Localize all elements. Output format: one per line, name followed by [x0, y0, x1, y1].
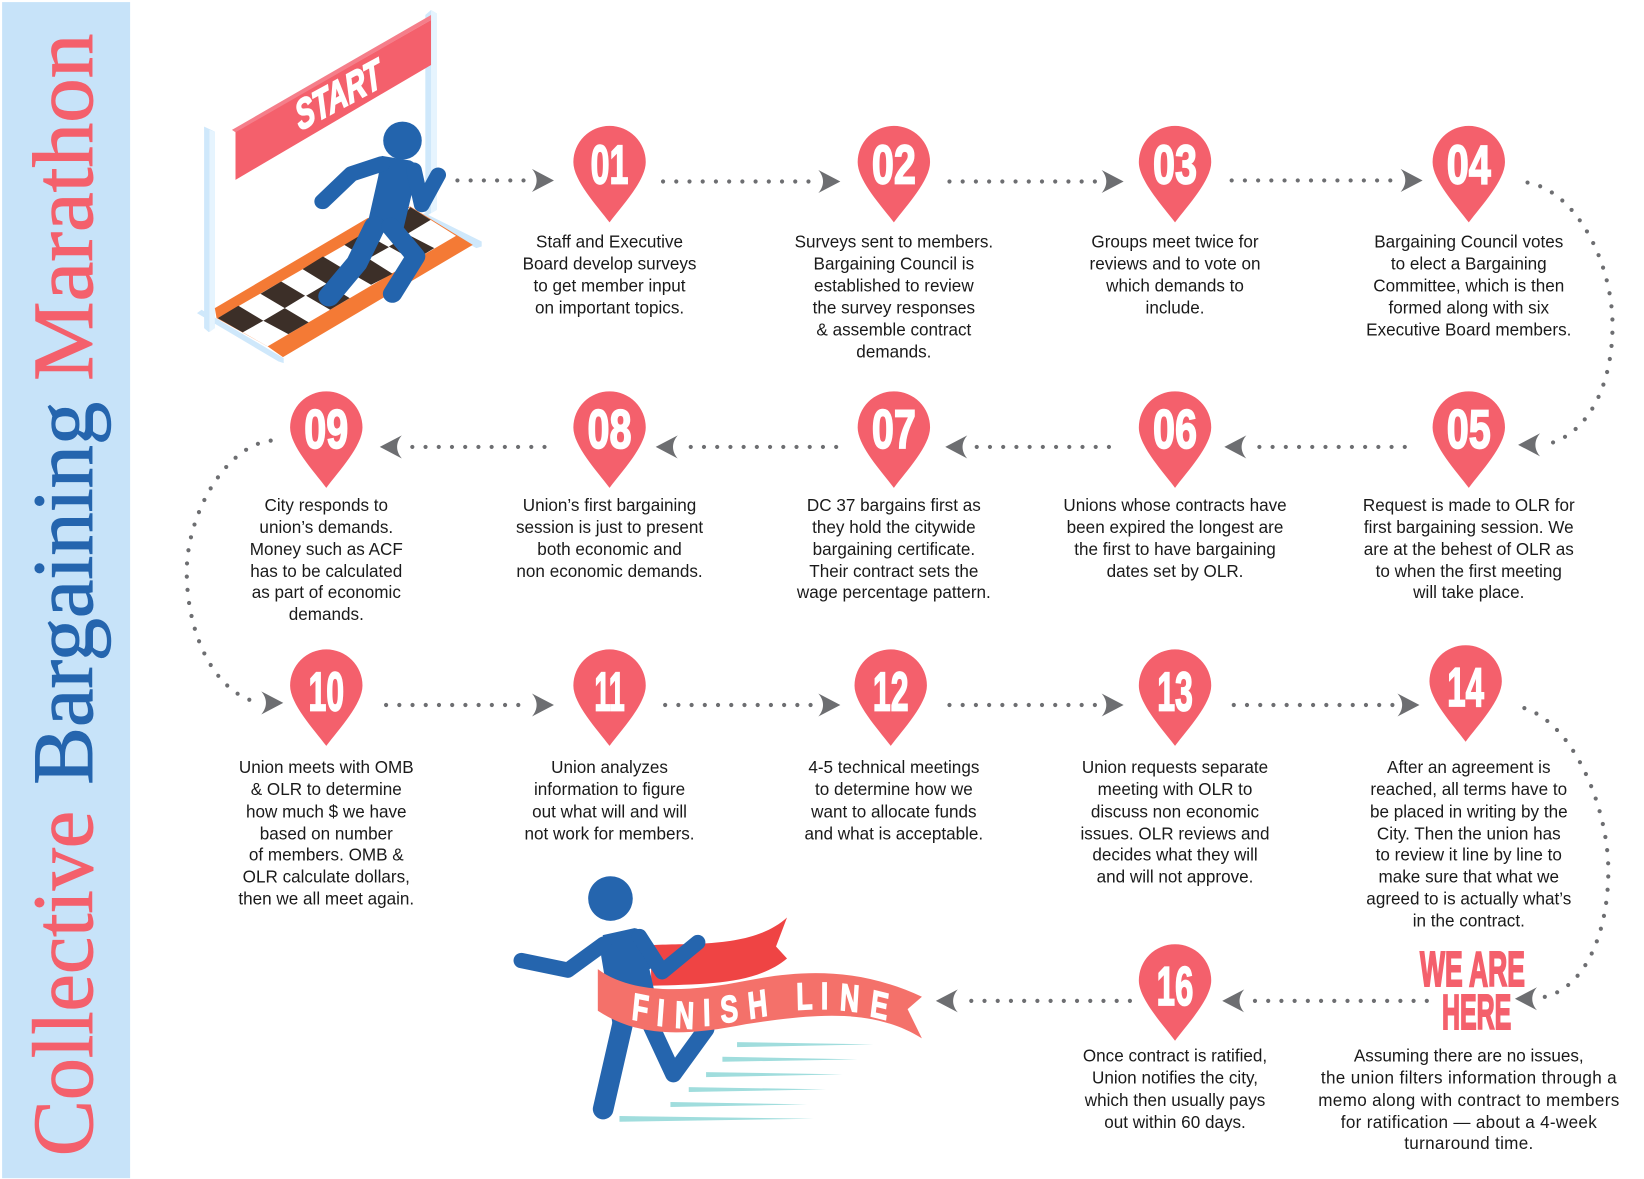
arrow: 16 to finish — [936, 989, 1130, 1012]
text 07: DC 37 bargains first as — [807, 496, 981, 515]
text 08: both economic and — [537, 540, 682, 559]
pin 07: 07 — [872, 399, 916, 460]
pin 03 — [1139, 126, 1211, 222]
pin 12: 12 — [873, 661, 909, 722]
text 03: which demands to — [1105, 277, 1244, 296]
pin 04: 04 — [1447, 135, 1491, 196]
text 06: been expired the longest are — [1067, 518, 1283, 537]
text 14: make sure that what we — [1379, 867, 1559, 886]
text 15: memo along with contract to members — [1318, 1091, 1619, 1110]
pin 06: 06 — [1153, 399, 1197, 460]
title: Collective Bargaining Marathon — [15, 34, 111, 1156]
pin 16 — [1139, 944, 1211, 1041]
text 04: Executive Board members. — [1366, 321, 1571, 340]
text 09: Money such as ACF — [250, 540, 403, 559]
text 10: of members. OMB & — [249, 845, 404, 864]
text 09: demands. — [289, 605, 364, 624]
text 09: City responds to — [265, 496, 388, 515]
runner figure — [521, 876, 706, 1109]
pin 02 — [858, 126, 930, 222]
pin 14 — [1429, 645, 1502, 742]
text 05: are at the behest of OLR as — [1364, 540, 1574, 559]
arrow: 14 to we are here — [1515, 708, 1608, 1010]
illustration: runner at finish line — [521, 876, 922, 1122]
step 06 — [1063, 391, 1287, 581]
text 07: wage percentage pattern. — [796, 583, 991, 602]
step 15: we are here — [1318, 942, 1619, 1153]
pin 11: 11 — [594, 661, 625, 722]
pin 13 — [1139, 649, 1211, 746]
text 16: Union notifies the city, — [1092, 1069, 1258, 1088]
text 14: agreed to is actually what’s — [1366, 889, 1571, 908]
text 04: to elect a Bargaining — [1391, 255, 1547, 274]
step 14 — [1366, 645, 1571, 930]
text 15: turnaround time. — [1404, 1134, 1533, 1153]
step 09 — [250, 391, 403, 624]
pin 09: 09 — [304, 399, 348, 460]
pin 09 — [290, 391, 362, 488]
arrow: 02 to 03 — [949, 170, 1124, 193]
arrow: we are here to 16 — [1222, 989, 1427, 1012]
text 02: Bargaining Council is — [814, 255, 974, 274]
pin 11 — [573, 649, 646, 746]
text 14: reached, all terms have to — [1370, 780, 1567, 799]
title: Collective Bargaining Marathon: Collective — [15, 811, 111, 1156]
text 15: the union filters information through a — [1321, 1069, 1617, 1088]
arrow: 03 to 04 — [1232, 169, 1423, 192]
pin 05: 05 — [1447, 399, 1491, 460]
arrow: 08 to 09 — [380, 435, 545, 458]
text 16: which then usually pays — [1084, 1091, 1265, 1110]
pin 04 — [1433, 126, 1505, 222]
arrow: 01 to 02 — [663, 170, 840, 193]
text 06: the first to have bargaining — [1074, 540, 1276, 559]
text 04: formed along with six — [1388, 299, 1550, 318]
text 14: After an agreement is — [1387, 758, 1551, 777]
text 13: issues. OLR reviews and — [1080, 824, 1270, 843]
text 14: be placed in writing by the — [1370, 802, 1568, 821]
step 12 — [805, 649, 983, 843]
pin 10: 10 — [308, 661, 344, 722]
text 02: Surveys sent to members. — [795, 233, 993, 252]
pin 01: 01 — [591, 135, 628, 196]
text 08: non economic demands. — [516, 562, 703, 581]
step 01 — [523, 126, 696, 318]
text 12: and what is acceptable. — [805, 824, 983, 843]
text 05: to when the first meeting — [1376, 562, 1562, 581]
text 12: want to allocate funds — [810, 802, 977, 821]
step 07 — [796, 391, 991, 602]
arrow: 04 to 05 — [1518, 183, 1613, 456]
ribbon back — [651, 918, 787, 986]
text 13: decides what they will — [1092, 845, 1258, 864]
text 12: to determine how we — [815, 780, 973, 799]
finish line ribbon: FINISH LINE — [630, 974, 891, 1037]
text 03: Groups meet twice for — [1091, 233, 1259, 252]
text 09: as part of economic — [252, 583, 401, 602]
pin 03: 03 — [1153, 135, 1197, 196]
arrow: 10 to 11 — [386, 693, 554, 717]
illustration: runner at start line — [197, 10, 482, 363]
text 15: for ratification — about a 4-week — [1341, 1113, 1597, 1132]
text 10: based on number — [260, 824, 393, 843]
text 03: include. — [1146, 299, 1204, 318]
text 07: they hold the citywide — [812, 518, 976, 537]
text 06: dates set by OLR. — [1107, 562, 1243, 581]
text 11: Union analyzes — [551, 758, 668, 777]
text 01: to get member input — [534, 277, 686, 296]
text 04: Committee, which is then — [1373, 277, 1564, 296]
text 14: in the contract. — [1413, 911, 1525, 930]
we are here label: WE ARE — [1420, 942, 1525, 997]
text 13: meeting with OLR to — [1098, 780, 1252, 799]
step 03 — [1090, 126, 1261, 318]
checkered track — [215, 207, 473, 357]
arrow: 11 to 12 — [665, 693, 840, 717]
text 09: union’s demands. — [259, 518, 393, 537]
pin 02: 02 — [872, 135, 916, 196]
pin 16: 16 — [1157, 956, 1193, 1017]
arrow: 13 to 14 — [1234, 693, 1419, 717]
arrow: 06 to 07 — [945, 435, 1109, 458]
text 10: then we all meet again. — [238, 889, 414, 908]
arrow: 07 to 08 — [656, 435, 836, 458]
speed lines — [619, 1042, 874, 1122]
text 02: demands. — [856, 343, 931, 362]
text 05: Request is made to OLR for — [1363, 496, 1575, 515]
step 11 — [525, 649, 695, 843]
step 05 — [1363, 391, 1575, 602]
text 13: discuss non economic — [1091, 802, 1260, 821]
text 09: has to be calculated — [250, 562, 402, 581]
text 10: OLR calculate dollars, — [243, 867, 410, 886]
title: Collective Bargaining Marathon: Bargaining — [15, 402, 111, 785]
text 01: on important topics. — [535, 299, 684, 318]
text 12: 4-5 technical meetings — [808, 758, 979, 777]
start banner: START — [291, 50, 388, 140]
text 02: the survey responses — [813, 299, 975, 318]
text 02: & assemble contract — [816, 321, 972, 340]
text 10: & OLR to determine — [251, 780, 402, 799]
text 05: will take place. — [1412, 583, 1524, 602]
arrow: 09 to 10 — [187, 441, 283, 714]
text 14: City. Then the union has — [1377, 824, 1561, 843]
title: Collective Bargaining Marathon: Marathon — [15, 34, 111, 381]
text 08: session is just to present — [516, 518, 703, 537]
step 16 — [1083, 944, 1267, 1132]
text 07: Their contract sets the — [809, 562, 978, 581]
text 11: information to figure — [534, 780, 685, 799]
we are here label: HERE — [1442, 985, 1511, 1040]
text 07: bargaining certificate. — [813, 540, 975, 559]
arrow: 12 to 13 — [949, 693, 1124, 717]
we are here label — [1420, 942, 1525, 1040]
step 02 — [795, 126, 993, 362]
text 15: Assuming there are no issues, — [1354, 1047, 1584, 1066]
pin 05 — [1433, 391, 1505, 488]
pin 01 — [573, 126, 646, 222]
step 04 — [1366, 126, 1571, 340]
text 13: and will not approve. — [1097, 867, 1253, 886]
pin 07 — [858, 391, 930, 488]
text 03: reviews and to vote on — [1090, 255, 1261, 274]
pin 12 — [855, 649, 927, 746]
step 08 — [516, 391, 703, 581]
pin 08: 08 — [588, 399, 632, 460]
text 13: Union requests separate — [1082, 758, 1268, 777]
text 14: to review it line by line to — [1376, 845, 1562, 864]
text 11: out what will and will — [532, 802, 687, 821]
text 10: Union meets with OMB — [239, 758, 414, 777]
step 10 — [238, 649, 414, 908]
text 16: out within 60 days. — [1104, 1113, 1246, 1132]
title panel — [2, 2, 130, 1178]
text 01: Board develop surveys — [523, 255, 696, 274]
runner figure — [323, 122, 438, 296]
text 04: Bargaining Council votes — [1374, 233, 1563, 252]
text 15 — [1318, 1047, 1619, 1153]
text 01: Staff and Executive — [536, 233, 683, 252]
text 08: Union’s first bargaining — [523, 496, 696, 515]
pin 10 — [290, 649, 362, 746]
pin 08 — [573, 391, 646, 488]
start banner — [232, 15, 431, 180]
text 11: not work for members. — [525, 824, 695, 843]
pin 06 — [1139, 391, 1211, 488]
text 05: first bargaining session. We — [1364, 518, 1574, 537]
pin 13: 13 — [1157, 661, 1193, 722]
text 06: Unions whose contracts have — [1063, 496, 1287, 515]
text 10: how much $ we have — [246, 802, 407, 821]
arrow: 05 to 06 — [1224, 435, 1405, 458]
pin 14: 14 — [1447, 657, 1484, 718]
step 13 — [1080, 649, 1270, 886]
arrow: start to 01 — [457, 169, 554, 192]
text 02: established to review — [814, 277, 974, 296]
text 16: Once contract is ratified, — [1083, 1047, 1267, 1066]
